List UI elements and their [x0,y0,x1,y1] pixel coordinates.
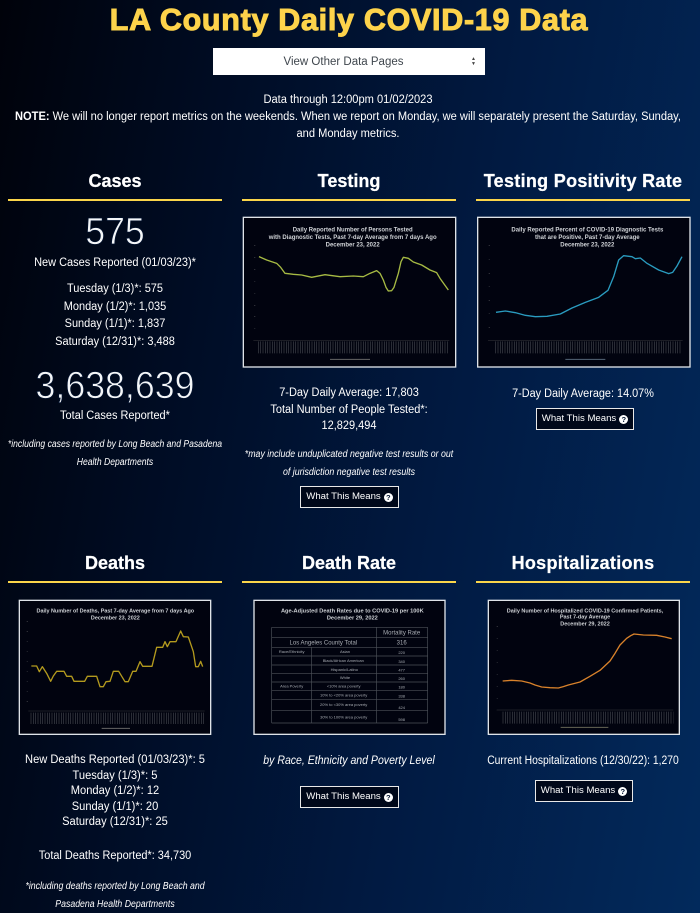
line chart: persons tested [242,216,456,368]
daily case list: Monday (1/2)*: 1,035 [64,300,166,312]
note: and Monday metrics. [296,128,400,140]
heading: testing positivity rate: Testing Positivity Rate [484,171,682,191]
testing averages: Total Number of People Tested*: [270,404,428,416]
cases footnote: *including cases reported by Long Beach and Pasadena [8,439,222,450]
panel: testing positivity rate [476,171,691,430]
table chart: mortality rate: Age-Adjusted Death Rates due to COVID-19 per 100K [281,608,425,614]
table chart: mortality rate: Race/Ethnicity [279,649,304,654]
table chart: mortality rate: Los Angeles County Total [290,641,357,647]
line chart: hospitalizations: Daily Number of Hospitalized COVID-19 Confirmed Patients, [507,608,664,614]
table chart: mortality rate: 316 [397,641,407,647]
total deaths: Total Deaths Reported*: 34,730 [39,850,191,862]
table chart: mortality rate: 340 [398,659,406,664]
table chart: mortality rate: 30% to 100% area poverty [320,714,367,719]
testing footnote [245,449,454,478]
note [15,111,681,140]
positivity average: 7-Day Daily Average: 14.07% [512,388,654,400]
line chart: positivity: that are Positive, Past 7-day Average [535,235,640,241]
line chart: persons tested: Daily Reported Number of Persons Tested [293,228,413,234]
total cases number: 3,638,639 [36,365,194,407]
deaths footnote: *including deaths reported by Long Beach and [25,881,205,892]
table chart: mortality rate: White [340,675,351,680]
table chart: mortality rate: 20% to <30% area poverty [320,702,367,707]
heading: death rate: Death Rate [302,553,396,573]
table chart: mortality rate: 424 [398,705,406,710]
button: what this means: ? [621,415,626,424]
rule [476,581,690,583]
heading: cases: Cases [88,171,142,191]
table chart: mortality rate: Area Poverty [280,684,303,689]
death rate caption: by Race, Ethnicity and Poverty Level [263,755,435,767]
table chart: mortality rate: 180 [398,685,406,690]
daily case list: Sunday (1/1)*: 1,837 [65,318,165,330]
button: what this means [535,780,633,802]
button: what this means [536,408,634,430]
dropdown: view other data pages [213,48,485,75]
table chart: mortality rate: December 29, 2022 [327,615,378,621]
cases footnote [8,439,222,468]
line chart: persons tested: with Diagnostic Tests, Past 7-day Average from 7 days Ago [268,235,437,241]
deaths list: Saturday (12/31)*: 25 [62,816,168,828]
cases footnote: Health Departments [77,457,153,468]
button: what this means: ? [620,787,625,796]
deaths footnote: Pasadena Health Departments [55,898,175,910]
deaths list: Sunday (1/1)*: 20 [72,800,158,812]
note: NOTE: We will no longer report metrics on the weekends. When we report on Monday, we will separately present the Saturday, Sunday, [15,111,681,123]
new cases number: 575 [85,211,145,253]
table chart: mortality rate: 477 [398,668,406,673]
rule [242,199,456,201]
dropdown: view other data pages: ▼ [471,61,476,67]
current hospitalizations: Current Hospitalizations (12/30/22): 1,270 [487,755,679,767]
rule [8,581,222,583]
daily case list: Tuesday (1/3)*: 575 [67,283,163,295]
testing footnote: of jurisdiction negative test results [283,467,415,478]
table chart: mortality rate: 10% to <20% area poverty [320,693,367,698]
button: what this means [300,786,399,808]
rule [8,199,222,201]
rule [476,199,690,201]
table chart: mortality rate: Hispanic/Latino [331,667,359,672]
table chart: mortality rate: 260 [398,676,406,681]
line chart: deaths: December 23, 2022 [91,615,140,621]
data date: Data through 12:00pm 01/02/2023 [263,94,433,106]
button: what this means: What This Means [306,491,381,502]
deaths footnote [25,881,205,910]
line chart: hospitalizations: Past 7-day Average [560,615,610,621]
deaths list: Tuesday (1/3)*: 5 [73,770,157,782]
rule [242,581,456,583]
line chart: positivity [477,216,691,368]
heading: testing: Testing [318,171,380,191]
panel: death rate [242,553,456,808]
total cases label: Total Cases Reported* [60,410,170,422]
table chart: mortality rate: Asian [340,649,350,654]
line chart: deaths: Daily Number of Deaths, Past 7-day Average from 7 days Ago [37,608,195,614]
new cases label: New Cases Reported (01/03/23)* [34,257,196,269]
line chart: hospitalizations [488,600,680,735]
button: what this means [300,486,399,508]
button: what this means: What This Means [542,413,616,424]
line chart: hospitalizations: December 29, 2022 [560,621,610,627]
daily case list: Saturday (12/31)*: 3,488 [55,336,175,348]
heading: hospitalizations: Hospitalizations [512,553,654,573]
table chart: mortality rate [253,600,446,735]
line chart: positivity: December 23, 2022 [560,242,615,248]
dropdown: view other data pages: ▲ [471,56,476,62]
dropdown: view other data pages: View Other Data Pages [284,56,403,68]
table chart: mortality rate: 220 [398,650,406,655]
testing averages: 12,829,494 [322,420,376,432]
table chart: mortality rate: 338 [398,694,406,699]
panel: cases [8,171,222,468]
line chart: positivity: Daily Reported Percent of COVID-19 Diagnostic Tests [511,228,664,234]
deaths list [25,754,205,828]
button: what this means: What This Means [541,785,615,796]
deaths list: Monday (1/2)*: 12 [71,785,159,797]
deaths list: New Deaths Reported (01/03/23)*: 5 [25,754,205,766]
panel: deaths [8,553,222,910]
testing averages [270,387,428,432]
testing averages: 7-Day Daily Average: 17,803 [279,387,419,399]
table chart: mortality rate: 598 [398,717,406,722]
button: what this means: ? [386,793,391,802]
table chart: mortality rate: Black/African American [323,658,364,663]
button: what this means: What This Means [306,791,381,802]
heading: deaths: Deaths [85,553,145,573]
line chart: persons tested: December 23, 2022 [326,242,380,248]
daily case list [55,283,175,348]
button: what this means: ? [386,493,391,502]
testing footnote: *may include unduplicated negative test results or out [245,449,453,460]
line chart: deaths [18,600,212,735]
table chart: mortality rate: Mortality Rate [383,631,421,637]
panel: hospitalizations [476,553,690,802]
table chart: mortality rate: <10% area poverty [327,684,361,689]
panel: testing [242,171,456,508]
title: LA County Daily COVID-19 Data [110,3,588,37]
